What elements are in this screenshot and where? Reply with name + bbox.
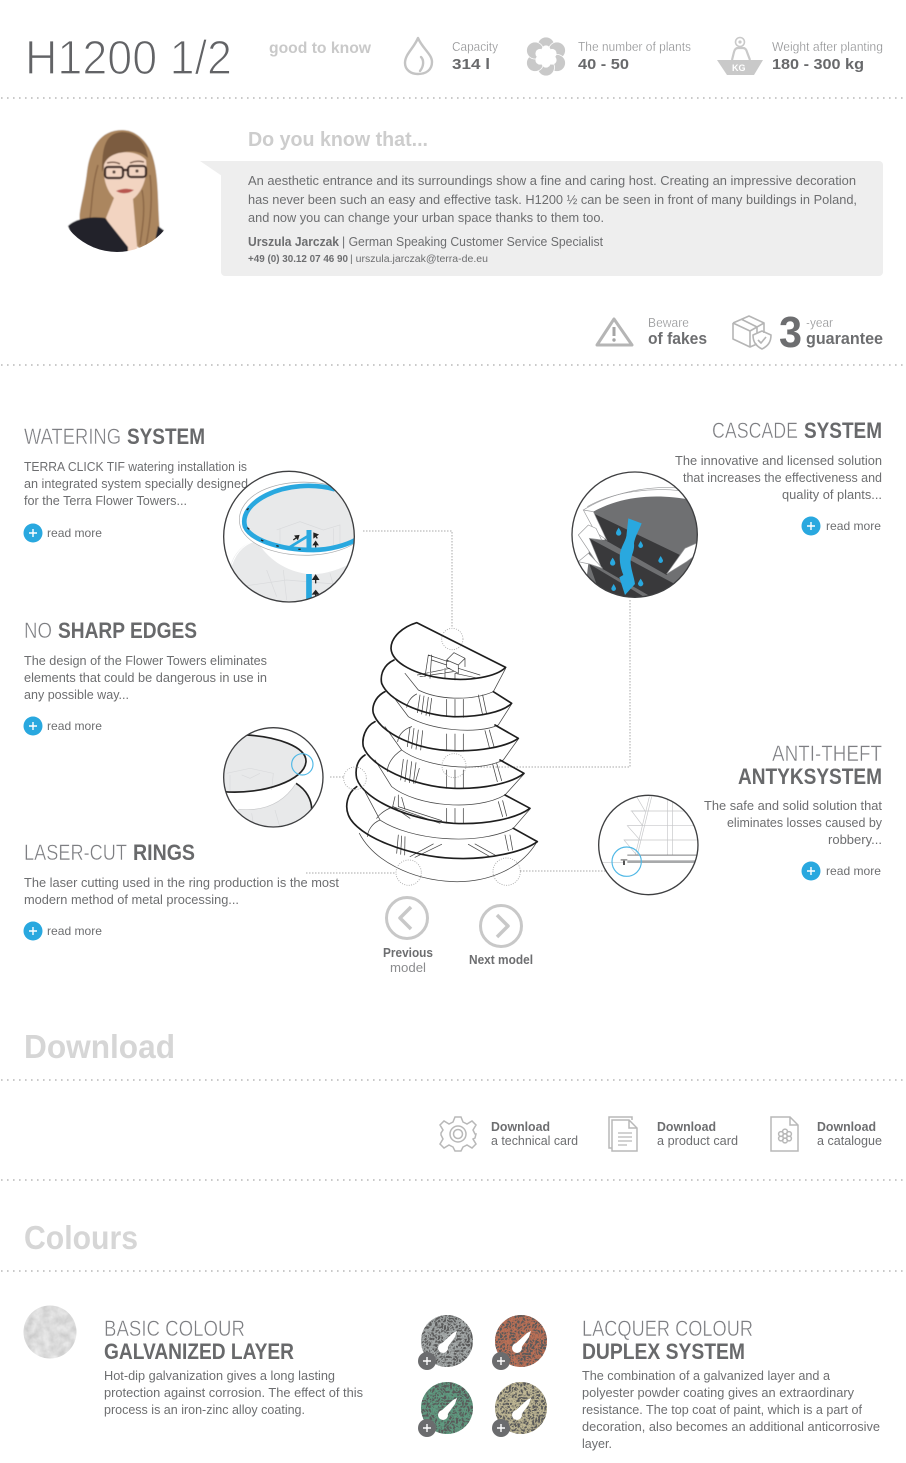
spec: number of plants: 40 - 50 — [578, 56, 629, 73]
spec: weight: Weight after planting — [772, 40, 883, 54]
heading — [24, 424, 205, 449]
download: product card: Download — [657, 1119, 716, 1134]
badge: beware of fakes — [597, 316, 707, 348]
description: quality of plants... — [782, 487, 882, 502]
panel: speech bubble — [200, 161, 883, 276]
heading: LACQUER COLOUR — [582, 1316, 753, 1341]
spec: weight: 180 - 300 kg — [772, 56, 864, 73]
author: | German Speaking Customer Service Specialist — [342, 234, 603, 249]
spec: capacity — [405, 38, 499, 74]
tower illustration — [344, 623, 537, 885]
heading: download: Download — [24, 1028, 175, 1065]
icon: document — [609, 1117, 637, 1151]
download: technical card — [440, 1117, 578, 1151]
quote text: and now you can change your urban space thanks to them too. — [248, 210, 604, 225]
description — [582, 1368, 880, 1451]
next model button — [469, 906, 533, 967]
spec: capacity: 314 l — [452, 56, 490, 73]
badge: 3-year guarantee: -year — [806, 316, 833, 330]
heading: ANTI-THEFT — [772, 741, 882, 766]
read more: read more — [47, 526, 102, 540]
connector lines — [306, 531, 630, 873]
heading — [738, 741, 882, 789]
description: eliminates losses caused by — [727, 815, 882, 830]
badge: beware of fakes: of fakes — [648, 329, 707, 348]
description: process is an iron-zinc alloy coating. — [104, 1402, 305, 1417]
icon: right arrow circle — [480, 906, 522, 946]
title: H1200 1/2 — [25, 32, 232, 85]
download: product card — [609, 1117, 738, 1151]
panel: lacquer colour — [582, 1316, 880, 1451]
detail circle: cascade — [572, 472, 700, 607]
heading: RINGS — [133, 840, 195, 865]
quote text — [248, 173, 857, 225]
icon: gear — [440, 1117, 476, 1151]
panel: no sharp edges — [24, 618, 267, 736]
heading: SYSTEM — [127, 424, 205, 449]
icon: left arrow circle — [386, 898, 428, 938]
description: protection against corrosion. The effect of this — [104, 1385, 363, 1400]
heading: SHARP EDGES — [58, 618, 197, 643]
heading: ANTYKSYSTEM — [738, 764, 882, 789]
next model button: Next model — [469, 952, 533, 967]
spec: weight — [717, 38, 883, 75]
heading — [582, 1316, 753, 1364]
description: The innovative and licensed solution — [675, 453, 882, 468]
icon: weight — [717, 38, 763, 75]
good to know label: good to know — [269, 40, 372, 57]
previous model button: model — [390, 960, 426, 975]
description: an integrated system specially designed — [24, 476, 248, 491]
heading: BASIC COLOUR — [104, 1316, 245, 1341]
read more — [24, 922, 102, 940]
description: that increases the effectiveness and — [683, 470, 882, 485]
swatches: lacquer colours — [418, 1315, 547, 1437]
icon: box with shield — [733, 316, 771, 349]
author: | urszula.jarczak@terra-de.eu — [350, 254, 488, 265]
panel: anti-theft — [704, 741, 882, 880]
swatch: beige — [492, 1382, 547, 1437]
swatch: green — [418, 1382, 473, 1437]
icon: weight: KG — [732, 63, 746, 73]
heading: GALVANIZED LAYER — [104, 1339, 294, 1364]
swatch: grey — [418, 1315, 473, 1370]
panel: cascade system — [675, 418, 882, 536]
read more — [24, 716, 102, 736]
swatch: galvanized — [24, 1306, 76, 1358]
description: Hot-dip galvanization gives a long lasting — [104, 1368, 335, 1383]
panel: laser-cut rings — [24, 840, 339, 940]
read more: read more — [826, 519, 881, 533]
heading: WATERING — [24, 424, 121, 449]
description: polyester powder coating gives an extraordinary — [582, 1385, 854, 1400]
detail circle: no sharp edges — [220, 728, 323, 835]
spec: number of plants: The number of plants — [578, 40, 691, 54]
read more — [802, 862, 881, 880]
description — [704, 798, 882, 847]
download: catalogue: a catalogue — [817, 1133, 882, 1148]
quote text: has never been such an easy and effective task. H1200 ½ can be seen in front of many buildings in Poland, — [248, 192, 857, 207]
download: technical card: a technical card — [491, 1133, 578, 1148]
description: resistance. The top coat of paint, which is a part of — [582, 1402, 862, 1417]
description: for the Terra Flower Towers... — [24, 493, 187, 508]
read more: read more — [47, 924, 102, 938]
author — [248, 234, 603, 265]
detail circle: watering — [220, 471, 357, 607]
read more: read more — [826, 864, 881, 878]
download: technical card: Download — [491, 1119, 550, 1134]
read more — [802, 516, 881, 536]
description: layer. — [582, 1436, 612, 1451]
description: elements that could be dangerous in use in — [24, 670, 267, 685]
description: The laser cutting used in the ring production is the most — [24, 875, 339, 890]
description: robbery... — [828, 832, 882, 847]
download: catalogue: Download — [817, 1119, 876, 1134]
download: product card: a product card — [657, 1133, 738, 1148]
heading: DUPLEX SYSTEM — [582, 1339, 745, 1364]
description — [24, 875, 339, 907]
quote text: An aesthetic entrance and its surroundings show a fine and caring host. Creating an impressive decoration — [248, 173, 856, 188]
heading: NO — [24, 618, 52, 643]
badge: 3-year guarantee: 3 — [779, 308, 802, 357]
panel: basic colour — [104, 1316, 363, 1417]
heading — [712, 418, 882, 443]
description — [24, 459, 248, 508]
detail circle: anti-theft — [599, 795, 701, 895]
heading — [104, 1316, 294, 1364]
description: modern method of metal processing... — [24, 892, 239, 907]
spec: number of plants — [526, 37, 691, 76]
description — [104, 1368, 363, 1417]
badge: 3-year guarantee — [733, 308, 883, 357]
heading: SYSTEM — [804, 418, 882, 443]
description — [675, 453, 882, 502]
heading: CASCADE — [712, 418, 798, 443]
author: +49 (0) 30.12 07 46 90 — [248, 254, 348, 265]
heading: LASER-CUT — [24, 840, 127, 865]
panel: watering system — [24, 424, 248, 542]
badge: 3-year guarantee: guarantee — [806, 329, 883, 348]
previous model button: Previous — [383, 945, 433, 960]
icon: water drop — [405, 38, 432, 74]
description: The safe and solid solution that — [704, 798, 882, 813]
spec: capacity: Capacity — [452, 40, 499, 54]
icon: flower — [526, 37, 566, 76]
portrait — [68, 129, 164, 252]
download: catalogue — [771, 1117, 882, 1151]
swatch: red — [492, 1315, 547, 1370]
description: decoration, also becomes an additional anticorrosive — [582, 1419, 880, 1434]
heading: do you know that: Do you know that... — [248, 129, 428, 151]
icon: warning triangle — [597, 319, 632, 345]
description: any possible way... — [24, 687, 129, 702]
description — [24, 653, 267, 702]
author: Urszula Jarczak — [248, 234, 340, 249]
heading: colours: Colours — [24, 1219, 138, 1256]
badge: beware of fakes: Beware — [648, 316, 689, 330]
description: The combination of a galvanized layer and a — [582, 1368, 831, 1383]
description: TERRA CLICK TIF watering installation is — [24, 459, 247, 474]
read more — [24, 524, 102, 542]
read more: read more — [47, 719, 102, 733]
previous model button — [383, 898, 433, 975]
description: The design of the Flower Towers eliminates — [24, 653, 267, 668]
icon: catalogue page — [771, 1117, 798, 1151]
